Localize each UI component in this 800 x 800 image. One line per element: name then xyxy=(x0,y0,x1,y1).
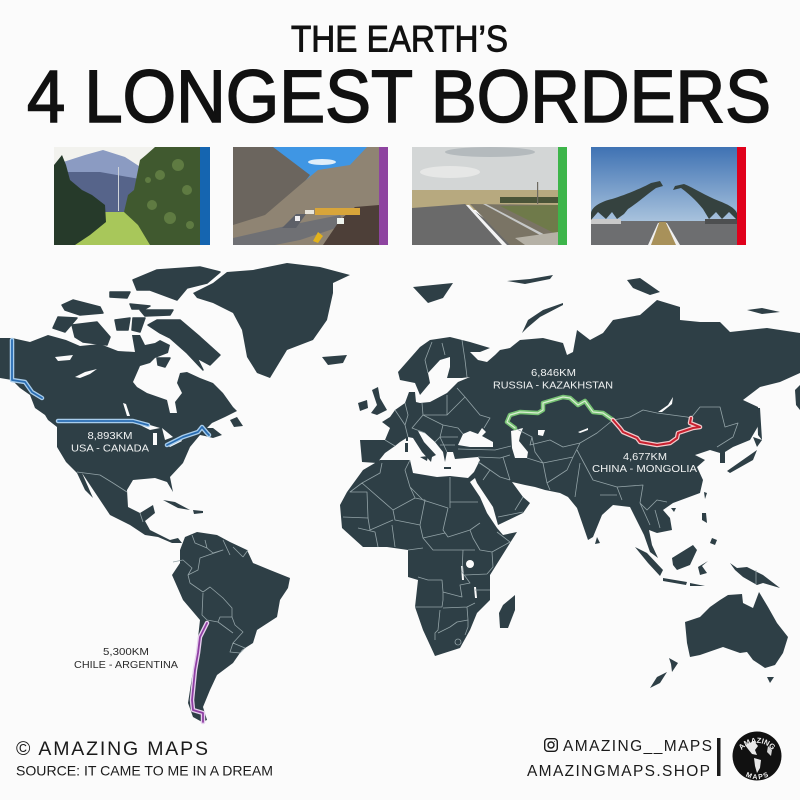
footer divider xyxy=(717,738,720,776)
footer credit: SOURCE: IT CAME TO ME IN A DREAM xyxy=(16,762,273,778)
label: USA-Canada: USA - CANADA xyxy=(71,442,149,454)
label: China-Mongolia xyxy=(592,451,697,475)
label: Chile-Argentina: CHILE - ARGENTINA xyxy=(74,659,178,671)
South America xyxy=(172,532,290,722)
North America xyxy=(0,335,237,543)
footer credit xyxy=(16,738,273,778)
New Guinea xyxy=(730,563,780,588)
Borneo xyxy=(672,545,697,570)
Sakhalin xyxy=(757,408,762,440)
Great Britain xyxy=(371,387,387,415)
Europe borders xyxy=(385,340,511,458)
world map xyxy=(0,263,800,722)
label: China-Mongolia: CHINA - MONGOLIA xyxy=(592,463,697,475)
Mindanao xyxy=(710,538,717,545)
Australia xyxy=(685,592,788,668)
Honshu xyxy=(727,450,757,473)
Newfoundland xyxy=(230,417,243,427)
Sumatra xyxy=(635,547,663,576)
icon: instagram xyxy=(545,739,557,751)
Hainan xyxy=(671,508,676,512)
label: USA-Canada: 8,893KM xyxy=(88,430,132,442)
footer handle and shop: AMAZING__MAPS xyxy=(563,738,712,755)
Franz Josef Land xyxy=(507,275,553,284)
Canadian Arctic islands xyxy=(53,267,220,370)
Hispaniola xyxy=(193,510,203,514)
border: USA-Canada xyxy=(12,340,209,445)
Afro-Eurasia xyxy=(340,300,800,656)
title xyxy=(27,18,771,138)
Madagascar xyxy=(499,595,515,628)
border: Russia-Kazakhstan xyxy=(507,397,613,428)
Sardinia xyxy=(405,443,408,452)
footer handle and shop: AMAZINGMAPS.SHOP xyxy=(527,763,710,780)
Severnaya Zemlya xyxy=(627,278,660,295)
New Guinea border xyxy=(755,570,757,584)
Iceland xyxy=(322,355,347,365)
label: Russia-Kazakhstan xyxy=(493,367,613,392)
border: Chile-Argentina xyxy=(192,623,207,722)
Hokkaido xyxy=(753,437,762,447)
Novaya Zemlya xyxy=(522,303,563,333)
logo: Amazing Maps xyxy=(732,732,782,780)
Java xyxy=(663,578,687,585)
Corsica xyxy=(406,436,408,441)
label: Chile-Argentina: 5,300KM xyxy=(103,646,149,658)
New Zealand south xyxy=(650,672,667,688)
label: Russia-Kazakhstan: RUSSIA - KAZAKHSTAN xyxy=(493,380,613,392)
photo: Russia-Kazakhstan border xyxy=(412,147,567,245)
Americas borders xyxy=(77,472,248,653)
Sicily xyxy=(420,456,428,461)
Sri Lanka xyxy=(595,537,600,544)
Luzon xyxy=(702,513,707,523)
Asia borders xyxy=(478,407,738,528)
label: USA-Canada xyxy=(71,430,149,454)
Cuba xyxy=(163,500,190,510)
Africa borders xyxy=(343,460,510,640)
logo: Amazing Maps: MAPS xyxy=(746,772,768,780)
New Zealand north xyxy=(669,658,678,672)
Tasmania xyxy=(767,677,774,683)
title: THE EARTH’S xyxy=(291,18,508,60)
label: Chile-Argentina xyxy=(74,646,178,671)
label: China-Mongolia: 4,677KM xyxy=(623,451,667,463)
Crete xyxy=(444,467,451,469)
logo: Amazing Maps: AMAZING xyxy=(740,738,775,750)
photo: Chile-Argentina border xyxy=(233,147,388,245)
Sulawesi xyxy=(698,561,708,575)
label: Russia-Kazakhstan: 6,846KM xyxy=(531,367,576,379)
border: China-Mongolia xyxy=(613,418,700,445)
landmasses xyxy=(0,263,800,722)
Svalbard xyxy=(413,283,453,303)
photo: China-Mongolia border xyxy=(591,147,746,245)
Lesser Sunda Islands xyxy=(690,583,705,586)
New Siberian Islands xyxy=(747,308,780,314)
Greenland xyxy=(193,263,350,378)
Taiwan xyxy=(704,492,707,499)
photo: USA-Canada border xyxy=(54,147,210,245)
Ireland xyxy=(358,400,368,411)
Kamchatka edge xyxy=(795,385,800,410)
country borders xyxy=(77,340,756,653)
lakes and inland seas xyxy=(55,355,673,598)
footer handle and shop xyxy=(527,738,712,780)
footer credit: © AMAZING MAPS xyxy=(16,738,208,760)
